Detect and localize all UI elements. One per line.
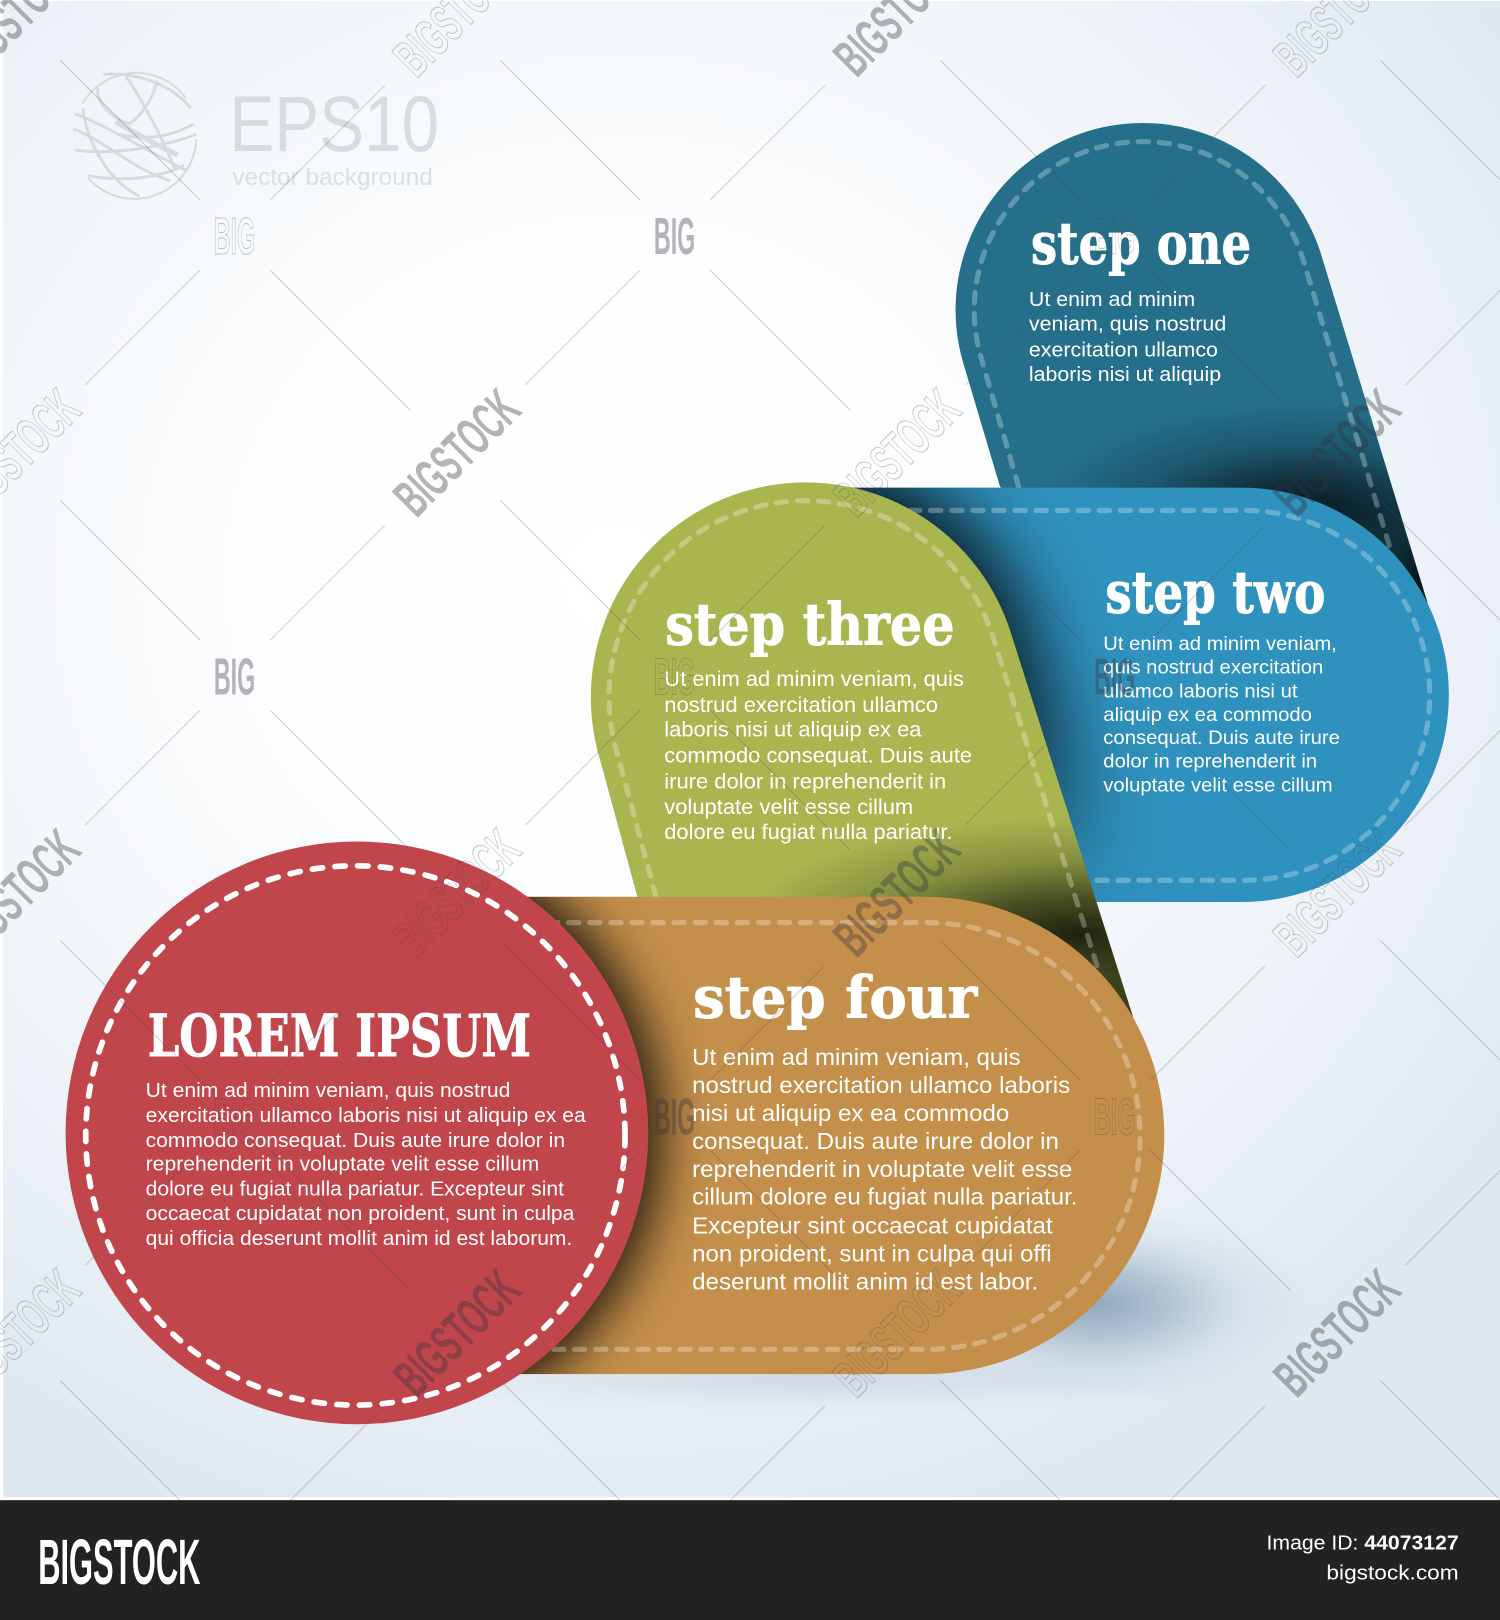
text: lorem ipsum body: exercitation ullamco laboris nisi ut aliquip ex ea <box>146 1104 586 1127</box>
text: step two body: dolor in reprehenderit in <box>1103 751 1317 773</box>
text: lorem ipsum body: Ut enim ad minim veniam, quis nostrud <box>146 1079 510 1102</box>
text: step three body: nostrud exercitation ullamco <box>664 694 938 717</box>
text: step three body: laboris nisi ut aliquip ex ea <box>664 719 922 742</box>
text: step two body: aliquip ex ea commodo <box>1103 704 1312 726</box>
heading: step three: step three <box>665 591 955 659</box>
text: step two body: Ut enim ad minim veniam, <box>1103 633 1337 655</box>
text: step one body: veniam, quis nostrud <box>1029 313 1226 336</box>
panel: step two <box>852 488 1449 902</box>
watermark layer: BIG <box>654 1087 695 1145</box>
text: step four body: consequat. Duis aute irure dolor in <box>692 1128 1059 1154</box>
watermark layer: BIGSTOCK <box>823 378 972 527</box>
text: step two body: quis nostrud exercitation <box>1103 657 1323 679</box>
panel: step one <box>956 123 1428 604</box>
text: bigstock.com: bigstock.com <box>1326 1562 1459 1585</box>
footer band: BIGSTOCK <box>38 1526 200 1598</box>
text: lorem ipsum body: commodo consequat. Duis aute irure dolor in <box>146 1129 565 1152</box>
text: lorem ipsum body: dolore eu fugiat nulla pariatur. Excepteur sint <box>146 1177 564 1200</box>
watermark layer: BIG <box>214 207 255 265</box>
text: step two body: consequat. Duis aute irure <box>1103 727 1340 749</box>
text: step four body: Excepteur sint occaecat cupidatat <box>692 1213 1053 1239</box>
heading: EPS10: EPS10 <box>229 80 439 168</box>
watermark layer: BIGSTOCK <box>1263 1259 1412 1408</box>
heading: step one: step one <box>1031 209 1251 277</box>
text: step three body: voluptate velit esse cillum <box>664 796 913 819</box>
text: step one body: exercitation ullamco <box>1029 338 1218 361</box>
heading: step four: step four <box>693 964 979 1032</box>
text: step four body: non proident, sunt in culpa qui offi <box>692 1240 1052 1266</box>
text: step four body <box>692 1044 1077 1294</box>
panel: step three <box>590 482 1134 1018</box>
icon: wire globe <box>73 73 196 199</box>
text: lorem ipsum body: qui officia deserunt mollit anim id est laborum. <box>146 1227 572 1250</box>
watermark layer: BIG <box>214 1087 255 1145</box>
watermark layer: BIGSTOCK <box>823 818 972 968</box>
watermark layer: BIG <box>1094 207 1135 265</box>
watermark layer: BIG <box>654 647 695 705</box>
text: step three body: Ut enim ad minim veniam, quis <box>664 668 964 691</box>
text: step three body: dolore eu fugiat nulla pariatur. <box>664 821 952 844</box>
text: step three body: irure dolor in reprehenderit in <box>664 770 946 793</box>
watermark layer: BIG <box>1094 1087 1135 1145</box>
text: step two body: voluptate velit esse cillum <box>1103 774 1333 796</box>
watermark layer: BIGSTOCK <box>382 1259 532 1408</box>
heading: lorem ipsum: LOREM IPSUM <box>148 1002 531 1070</box>
text: vector background: vector background <box>232 164 433 191</box>
watermark layer: BIGSTOCK <box>823 1259 972 1408</box>
text: step four body: nisi ut aliquip ex ea commodo <box>692 1100 1009 1126</box>
text: lorem ipsum body <box>146 1079 586 1250</box>
watermark layer: BIG <box>1094 647 1135 705</box>
text: step three body <box>664 668 972 844</box>
text: step four body: reprehenderit in voluptate velit esse <box>692 1156 1072 1182</box>
watermark layer: BIGSTOCK <box>382 818 532 968</box>
text: step four body: Ut enim ad minim veniam, quis <box>692 1044 1021 1070</box>
text: lorem ipsum body: occaecat cupidatat non proident, sunt in culpa <box>146 1202 575 1225</box>
text: step one body <box>1029 288 1226 386</box>
text: step four body: deserunt mollit anim id est labor. <box>692 1268 1038 1294</box>
watermark layer: BIGSTOCK <box>1263 378 1412 527</box>
text: step one body: laboris nisi ut aliquip <box>1029 363 1221 386</box>
text: step four body: cillum dolore eu fugiat nulla pariatur. <box>692 1184 1077 1210</box>
text: image id: Image ID: 44073127 <box>1267 1532 1459 1555</box>
text: step three body: commodo consequat. Duis aute <box>664 744 972 767</box>
text: step four body: nostrud exercitation ullamco laboris <box>692 1072 1070 1098</box>
footer band <box>0 1500 1500 1620</box>
heading: step two: step two <box>1105 559 1325 627</box>
text: lorem ipsum body: reprehenderit in voluptate velit esse cillum <box>146 1153 539 1176</box>
watermark layer: BIGSTOCK <box>1263 818 1412 968</box>
text: step two body <box>1103 633 1340 796</box>
watermark layer: BIGSTOCK <box>382 378 532 527</box>
panel: lorem ipsum circle <box>66 842 648 1424</box>
text: step one body: Ut enim ad minim <box>1029 288 1195 311</box>
text: step two body: ullamco laboris nisi ut <box>1103 680 1298 702</box>
watermark layer: BIG <box>654 207 695 265</box>
watermark layer: BIG <box>214 647 255 705</box>
panel: step four <box>520 896 1164 1374</box>
